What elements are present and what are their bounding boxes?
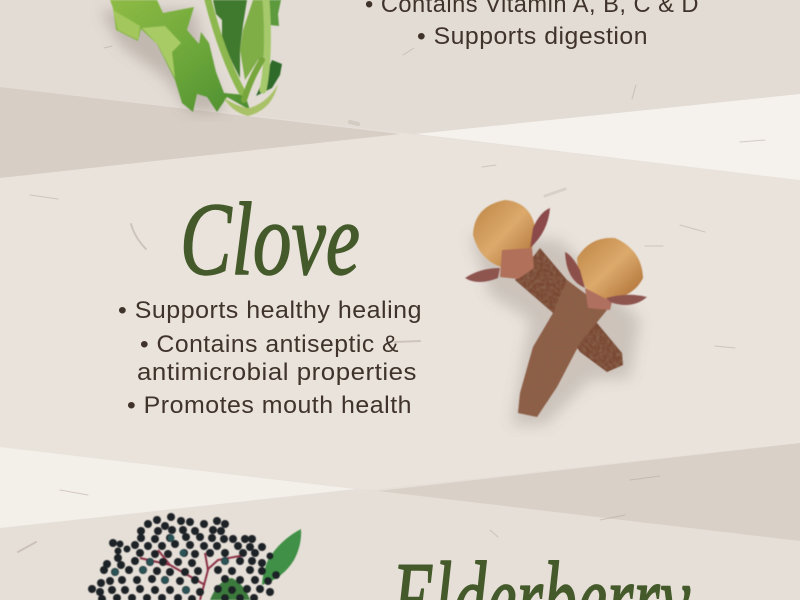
back dark leaf [213,0,247,78]
bullet list: clove benefits [118,297,422,419]
clove shadow [470,235,640,425]
right dark leaf tips [269,0,281,26]
folded ribbon wedge: lower right [378,443,800,541]
bullet list: top section: • Supports digestion [417,23,648,50]
folded ribbon wedge: upper right [416,94,800,180]
left bud [473,200,536,268]
folded ribbon wedge: lower left [0,447,356,528]
right bud [577,238,643,300]
left leaf highlight [142,26,181,78]
left bud sepals [530,208,550,248]
right bud sepals [565,252,585,288]
leaf base [224,84,278,116]
red stems [140,550,245,600]
bullet list: clove benefits: • Contains antiseptic & [140,331,399,358]
icon: elderberry cluster [88,513,301,600]
heading: Clove: Clove [180,182,360,297]
back stem [515,248,623,372]
bullet list: clove benefits: • Promotes mouth health [127,392,412,419]
icon: clove buds [465,200,647,425]
front stem [518,280,607,417]
bullet list: top section [365,0,699,50]
paper fibres [18,46,765,552]
leaf shadow [100,10,225,112]
teal berry highlights [112,534,228,594]
left serrated leaf [110,0,250,112]
elderberry leaf [262,529,301,585]
folded ribbon wedge: upper left [0,87,400,178]
bullet list: clove benefits: • Supports healthy healing [118,297,422,324]
middle leaf [240,0,266,80]
bullet list: clove benefits: antimicrobial properties [137,359,417,386]
lower green foliage [210,578,250,600]
berries [88,513,280,600]
icon: dandelion leaves [100,0,282,116]
stems [208,0,242,92]
